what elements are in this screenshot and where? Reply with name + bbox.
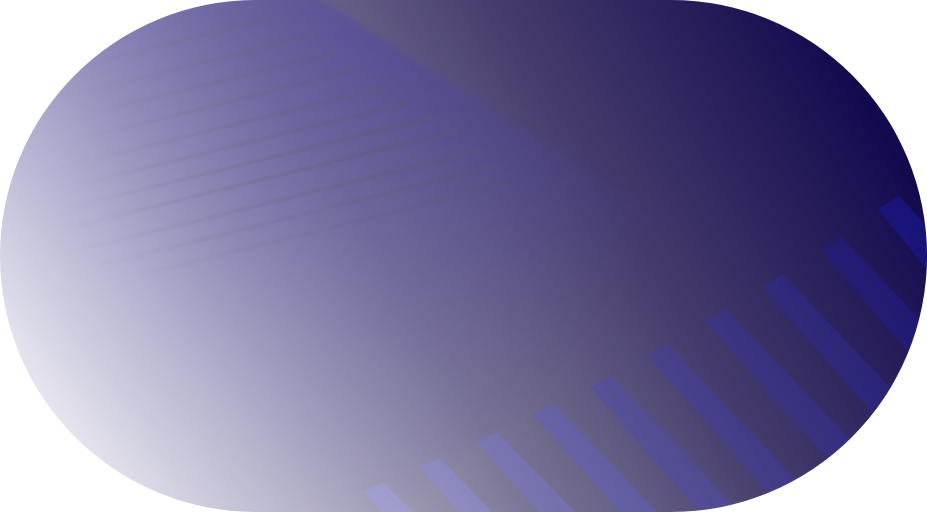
- bar 4: [705, 309, 850, 458]
- lower-right diagonal bars: [363, 196, 927, 512]
- bar 5: [647, 344, 796, 493]
- upper-left blue overlay: [0, 0, 588, 454]
- bar 6: [590, 376, 739, 512]
- bar 1: [878, 196, 927, 270]
- bar 10: [363, 483, 412, 512]
- bar 2: [821, 237, 920, 352]
- upper-left thin diagonal lines: [146, 12, 478, 236]
- bar 9: [419, 458, 492, 512]
- bar 7: [533, 404, 657, 512]
- bar 3: [762, 274, 890, 413]
- bar 8: [476, 432, 575, 512]
